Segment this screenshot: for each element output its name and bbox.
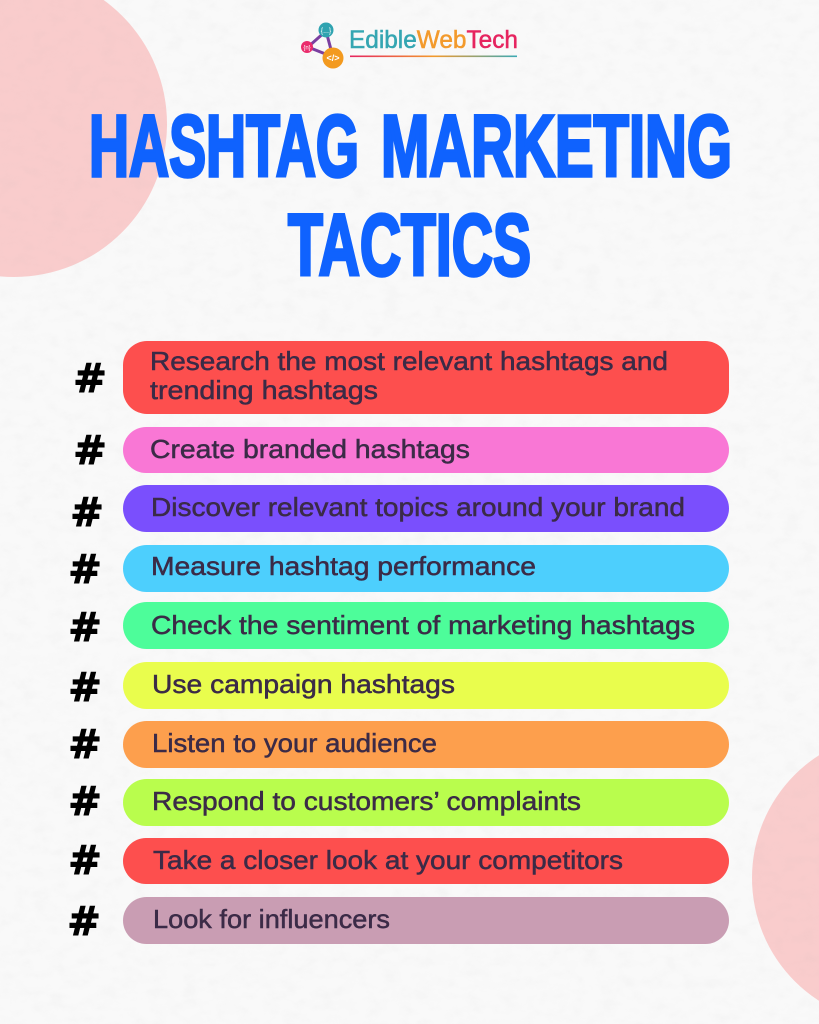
list item 7 (68, 721, 729, 768)
icon: network nodes (301, 22, 344, 68)
list item 4: # (68, 547, 102, 593)
list item 3 (70, 485, 729, 536)
list item 6: # (68, 665, 102, 711)
list item 10: # (67, 899, 101, 945)
icon: network nodes: </> (326, 53, 340, 63)
list item 10 (67, 897, 729, 945)
list item 1: trending hashtags (150, 375, 378, 405)
decorative circle: bottom right (752, 732, 819, 1024)
logo: EdibleWebTech (301, 22, 518, 68)
list item 5: # (68, 605, 102, 651)
list item 10: Look for influencers (153, 904, 390, 934)
list item 1: # (73, 356, 107, 402)
list item 8: # (68, 779, 102, 825)
list item 8: Respond to customers’ complaints (152, 786, 581, 816)
decorative circle: top left (0, 0, 167, 277)
list item 3: # (70, 490, 104, 536)
list item 5 (68, 602, 729, 651)
list item 2 (73, 427, 729, 474)
list item 9: # (68, 838, 102, 884)
list item 6: Use campaign hashtags (152, 669, 455, 699)
list item 4: Measure hashtag performance (151, 551, 536, 581)
list item 7: # (68, 722, 102, 768)
list item 9: Take a closer look at your competitors (153, 845, 623, 875)
list item 2: # (73, 428, 107, 474)
title: HASHTAG (89, 98, 359, 195)
list item 4 (68, 545, 729, 593)
list item 5: Check the sentiment of marketing hashtags (151, 610, 695, 640)
list item 1: Research the most relevant hashtags and (150, 346, 668, 376)
list item 6 (68, 662, 729, 711)
list item 3: Discover relevant topics around your brand (151, 492, 685, 522)
logo wordmark: EdibleWebTech (349, 26, 518, 54)
list item 2: Create branded hashtags (150, 434, 470, 464)
list item 9 (68, 838, 729, 884)
list item 1 (73, 341, 729, 414)
list item 7: Listen to your audience (152, 728, 437, 758)
title (89, 98, 732, 294)
list item 8 (68, 779, 729, 826)
title: TACTICS (288, 197, 531, 294)
icon: network nodes: {...} (321, 28, 332, 35)
icon: network nodes: {n} (303, 46, 311, 52)
